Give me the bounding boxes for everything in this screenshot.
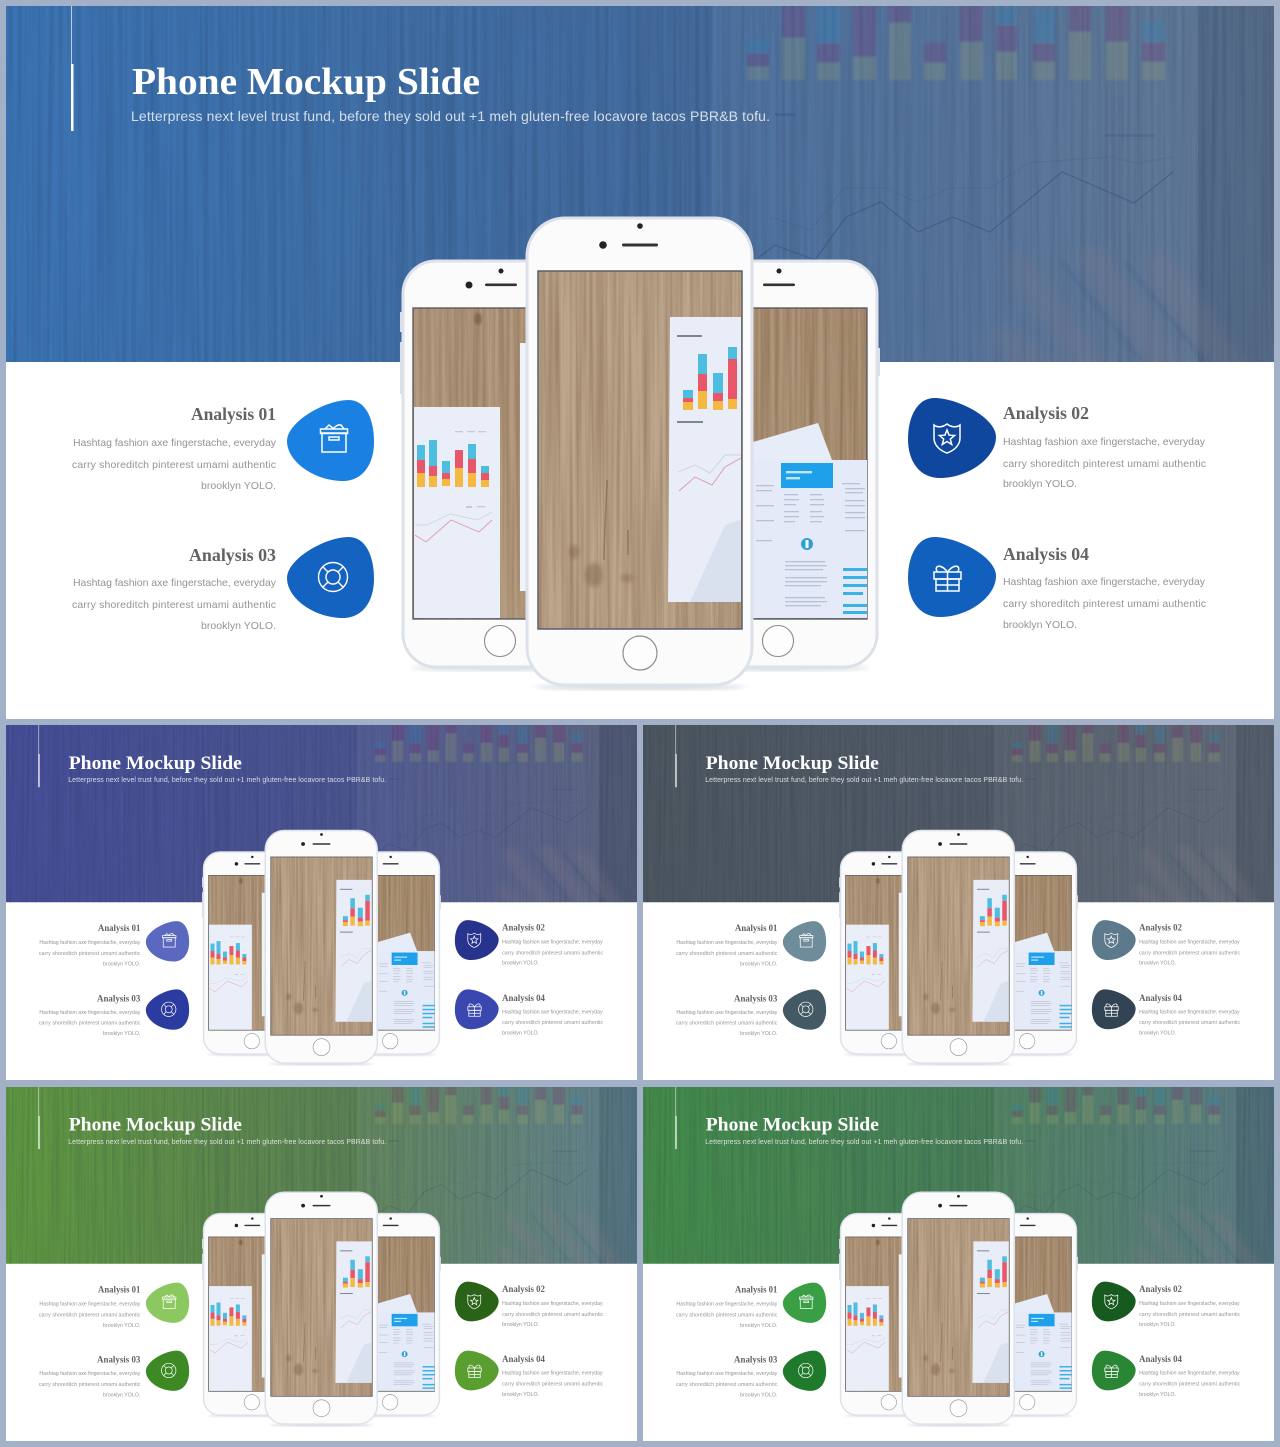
icon: gift: [1092, 1351, 1136, 1390]
body text: [1003, 436, 1206, 490]
item: Analysis 03: [39, 1351, 189, 1398]
body text: carry shoreditch pinterest umami authentic: [1139, 1312, 1241, 1318]
body text: [39, 1371, 141, 1398]
subtitle: Letterpress next level trust fund, before they sold out +1 meh gluten-free locavore tacos PBR&B tofu.: [68, 777, 386, 784]
item: Analysis 01: [39, 1283, 189, 1329]
icon: box: [783, 921, 826, 962]
body text: Hashtag fashion axe fingerstache, everyday: [502, 1370, 603, 1376]
icon: shield: [455, 1282, 499, 1321]
body text: Hashtag fashion axe fingerstache, everyday: [676, 940, 778, 946]
body text: brooklyn YOLO.: [502, 1322, 539, 1328]
title: Phone Mockup Slide: [69, 1115, 242, 1136]
heading: Analysis 01: [98, 923, 140, 933]
icon: lifebuoy: [783, 989, 826, 1030]
body text: brooklyn YOLO.: [1139, 1322, 1176, 1328]
icon: lifebuoy: [287, 537, 374, 618]
slide: slate gray variant: [643, 725, 1274, 1080]
heading: Analysis 03: [97, 993, 141, 1003]
body text: brooklyn YOLO.: [1139, 1031, 1176, 1037]
icon: box: [783, 1283, 826, 1323]
accent line: [38, 1087, 40, 1149]
phone: center: [265, 831, 377, 1066]
body text: carry shoreditch pinterest umami authentic: [502, 1020, 604, 1026]
icon: gift: [1092, 989, 1136, 1029]
heading: Analysis 02: [502, 1284, 545, 1294]
icon: shield: [1092, 1282, 1136, 1321]
body text: [39, 1301, 141, 1329]
subtitle: Letterpress next level trust fund, before they sold out +1 meh gluten-free locavore tacos PBR&B tofu.: [705, 1139, 1023, 1146]
body text: carry shoreditch pinterest umami authentic: [72, 459, 276, 471]
heading: Analysis 03: [97, 1355, 141, 1365]
heading: Analysis 04: [502, 993, 545, 1003]
phone: center: [527, 218, 752, 690]
icon: lifebuoy: [146, 1351, 189, 1391]
body text: Hashtag fashion axe fingerstache, everyday: [1139, 1301, 1240, 1307]
body text: [1139, 1301, 1241, 1328]
body text: carry shoreditch pinterest umami authentic: [1003, 458, 1206, 470]
body text: [1139, 1370, 1241, 1398]
body text: carry shoreditch pinterest umami authentic: [676, 951, 778, 957]
body text: Hashtag fashion axe fingerstache, everyday: [502, 940, 603, 946]
title: Phone Mockup Slide: [132, 61, 480, 103]
title: Phone Mockup Slide: [706, 1115, 879, 1136]
item: Analysis 02: [455, 920, 604, 966]
accent line: [675, 1087, 677, 1149]
item: Analysis 04: [1092, 989, 1241, 1037]
body text: Hashtag fashion axe fingerstache, everyday: [676, 1371, 778, 1377]
heading: Analysis 03: [189, 545, 276, 565]
body text: Hashtag fashion axe fingerstache, everyday: [73, 437, 277, 449]
title: Phone Mockup Slide: [69, 753, 242, 774]
body text: carry shoreditch pinterest umami authentic: [1003, 598, 1206, 610]
banner photo background: [643, 722, 1274, 911]
item: Analysis 03: [72, 537, 374, 632]
body text: carry shoreditch pinterest umami authentic: [676, 1382, 778, 1388]
body text: brooklyn YOLO.: [502, 1031, 539, 1037]
body text: brooklyn YOLO.: [740, 1392, 777, 1398]
body text: Hashtag fashion axe fingerstache, everyday: [1139, 1370, 1240, 1376]
item: Analysis 01: [39, 921, 189, 967]
icon: box: [146, 921, 189, 962]
body text: Hashtag fashion axe fingerstache, everyday: [1139, 940, 1240, 946]
phone: right: [979, 852, 1078, 1056]
heading: Analysis 04: [1139, 993, 1182, 1003]
phone: right: [681, 261, 880, 671]
icon: shield: [1092, 920, 1136, 960]
banner photo background: [643, 1084, 1274, 1273]
body text: Hashtag fashion axe fingerstache, everyday: [39, 940, 141, 946]
item: Analysis 03: [39, 989, 189, 1037]
body text: carry shoreditch pinterest umami authentic: [39, 951, 141, 957]
body text: Hashtag fashion axe fingerstache, everyday: [39, 1010, 141, 1016]
accent line: [38, 725, 40, 787]
phone: left: [202, 852, 301, 1056]
slide: lime green variant: [6, 1087, 637, 1441]
body text: Hashtag fashion axe fingerstache, everyday: [676, 1301, 778, 1307]
item: Analysis 04: [455, 989, 604, 1037]
phone: left: [839, 1214, 938, 1417]
body text: [39, 940, 141, 967]
body text: Hashtag fashion axe fingerstache, everyday: [502, 1301, 603, 1307]
phone: right: [342, 1214, 441, 1417]
body text: [72, 437, 277, 492]
icon: lifebuoy: [146, 989, 189, 1030]
body text: carry shoreditch pinterest umami authentic: [676, 1021, 778, 1027]
body text: [1139, 1009, 1241, 1037]
body text: [502, 1009, 604, 1037]
item: Analysis 03: [676, 989, 826, 1037]
heading: Analysis 01: [735, 1285, 777, 1295]
icon: shield: [455, 920, 499, 960]
accent line: [71, 6, 74, 131]
banner photo background: [6, 0, 1274, 380]
phone: right: [342, 852, 441, 1056]
body text: Hashtag fashion axe fingerstache, everyday: [1003, 576, 1206, 588]
body text: [676, 1371, 778, 1398]
body text: carry shoreditch pinterest umami authentic: [1139, 1020, 1241, 1026]
subtitle: Letterpress next level trust fund, before they sold out +1 meh gluten-free locavore tacos PBR&B tofu.: [705, 777, 1023, 784]
body text: carry shoreditch pinterest umami authentic: [502, 951, 604, 957]
body text: carry shoreditch pinterest umami authentic: [502, 1381, 604, 1387]
body text: brooklyn YOLO.: [1139, 960, 1176, 966]
body text: carry shoreditch pinterest umami authentic: [39, 1021, 141, 1027]
title: Phone Mockup Slide: [706, 753, 879, 774]
body text: brooklyn YOLO.: [740, 1031, 777, 1037]
body text: brooklyn YOLO.: [103, 1323, 140, 1329]
phone: center: [902, 1192, 1014, 1427]
body text: carry shoreditch pinterest umami authentic: [502, 1312, 604, 1318]
body text: brooklyn YOLO.: [1139, 1392, 1176, 1398]
body text: Hashtag fashion axe fingerstache, everyday: [39, 1371, 141, 1377]
body text: [502, 940, 604, 966]
icon: gift: [455, 1351, 499, 1390]
slide: purple variant: [6, 725, 637, 1080]
item: Analysis 03: [676, 1351, 826, 1398]
icon: lifebuoy: [783, 1351, 826, 1391]
item: Analysis 02: [908, 398, 1206, 490]
body text: [39, 1010, 141, 1037]
body text: brooklyn YOLO.: [1003, 619, 1077, 631]
body text: [676, 940, 778, 967]
body text: Hashtag fashion axe fingerstache, everyday: [1003, 436, 1206, 448]
icon: shield: [908, 398, 996, 478]
banner photo background: [6, 722, 637, 911]
item: Analysis 04: [455, 1351, 604, 1398]
slide: blue main: [6, 6, 1274, 719]
body text: brooklyn YOLO.: [740, 961, 777, 967]
phone: center: [265, 1192, 377, 1427]
icon: box: [146, 1283, 189, 1323]
heading: Analysis 04: [1139, 1354, 1182, 1364]
body text: brooklyn YOLO.: [103, 1392, 140, 1398]
body text: [72, 577, 277, 632]
heading: Analysis 01: [98, 1285, 140, 1295]
heading: Analysis 01: [191, 404, 276, 424]
item: Analysis 01: [72, 400, 374, 492]
body text: [676, 1010, 778, 1037]
phone: right: [979, 1214, 1078, 1417]
heading: Analysis 02: [1003, 403, 1089, 423]
body text: brooklyn YOLO.: [1003, 478, 1077, 490]
heading: Analysis 04: [502, 1354, 545, 1364]
accent line: [675, 725, 677, 787]
body text: [502, 1301, 604, 1328]
heading: Analysis 02: [1139, 1284, 1182, 1294]
heading: Analysis 02: [502, 923, 545, 933]
body text: Hashtag fashion axe fingerstache, everyday: [502, 1009, 603, 1015]
item: Analysis 02: [1092, 1282, 1241, 1328]
body text: Hashtag fashion axe fingerstache, everyday: [1139, 1009, 1240, 1015]
body text: carry shoreditch pinterest umami authentic: [72, 599, 276, 611]
body text: [1139, 940, 1241, 966]
body text: brooklyn YOLO.: [740, 1323, 777, 1329]
subtitle: Letterpress next level trust fund, before they sold out +1 meh gluten-free locavore tacos PBR&B tofu.: [68, 1139, 386, 1146]
body text: carry shoreditch pinterest umami authentic: [39, 1312, 141, 1318]
item: Analysis 02: [455, 1282, 604, 1328]
phone: center: [902, 831, 1014, 1066]
heading: Analysis 01: [735, 923, 777, 933]
phone: left: [400, 261, 599, 671]
body text: brooklyn YOLO.: [201, 480, 276, 492]
item: Analysis 01: [676, 921, 826, 967]
heading: Analysis 02: [1139, 923, 1182, 933]
body text: [1003, 576, 1206, 631]
item: Analysis 01: [676, 1283, 826, 1329]
body text: brooklyn YOLO.: [103, 1031, 140, 1037]
heading: Analysis 03: [734, 993, 778, 1003]
body text: brooklyn YOLO.: [201, 620, 276, 632]
body text: carry shoreditch pinterest umami authentic: [1139, 951, 1241, 957]
body text: Hashtag fashion axe fingerstache, everyday: [39, 1301, 141, 1307]
heading: Analysis 03: [734, 1355, 778, 1365]
body text: brooklyn YOLO.: [103, 961, 140, 967]
body text: Hashtag fashion axe fingerstache, everyday: [73, 577, 277, 589]
item: Analysis 02: [1092, 920, 1241, 966]
item: Analysis 04: [1092, 1351, 1241, 1398]
body text: carry shoreditch pinterest umami authentic: [1139, 1381, 1241, 1387]
banner photo background: [6, 1084, 637, 1273]
icon: gift: [455, 989, 499, 1029]
body text: brooklyn YOLO.: [502, 960, 539, 966]
heading: Analysis 04: [1003, 544, 1089, 564]
body text: brooklyn YOLO.: [502, 1392, 539, 1398]
body text: carry shoreditch pinterest umami authentic: [39, 1382, 141, 1388]
phone: left: [202, 1214, 301, 1417]
slide: forest green variant: [643, 1087, 1274, 1441]
icon: box: [287, 400, 374, 481]
item: Analysis 04: [908, 537, 1206, 631]
body text: [502, 1370, 604, 1398]
body text: Hashtag fashion axe fingerstache, everyday: [676, 1010, 778, 1016]
phone: left: [839, 852, 938, 1056]
icon: gift: [908, 537, 996, 617]
body text: [676, 1301, 778, 1329]
body text: carry shoreditch pinterest umami authentic: [676, 1312, 778, 1318]
subtitle: Letterpress next level trust fund, before they sold out +1 meh gluten-free locavore tacos PBR&B tofu.: [131, 108, 770, 124]
